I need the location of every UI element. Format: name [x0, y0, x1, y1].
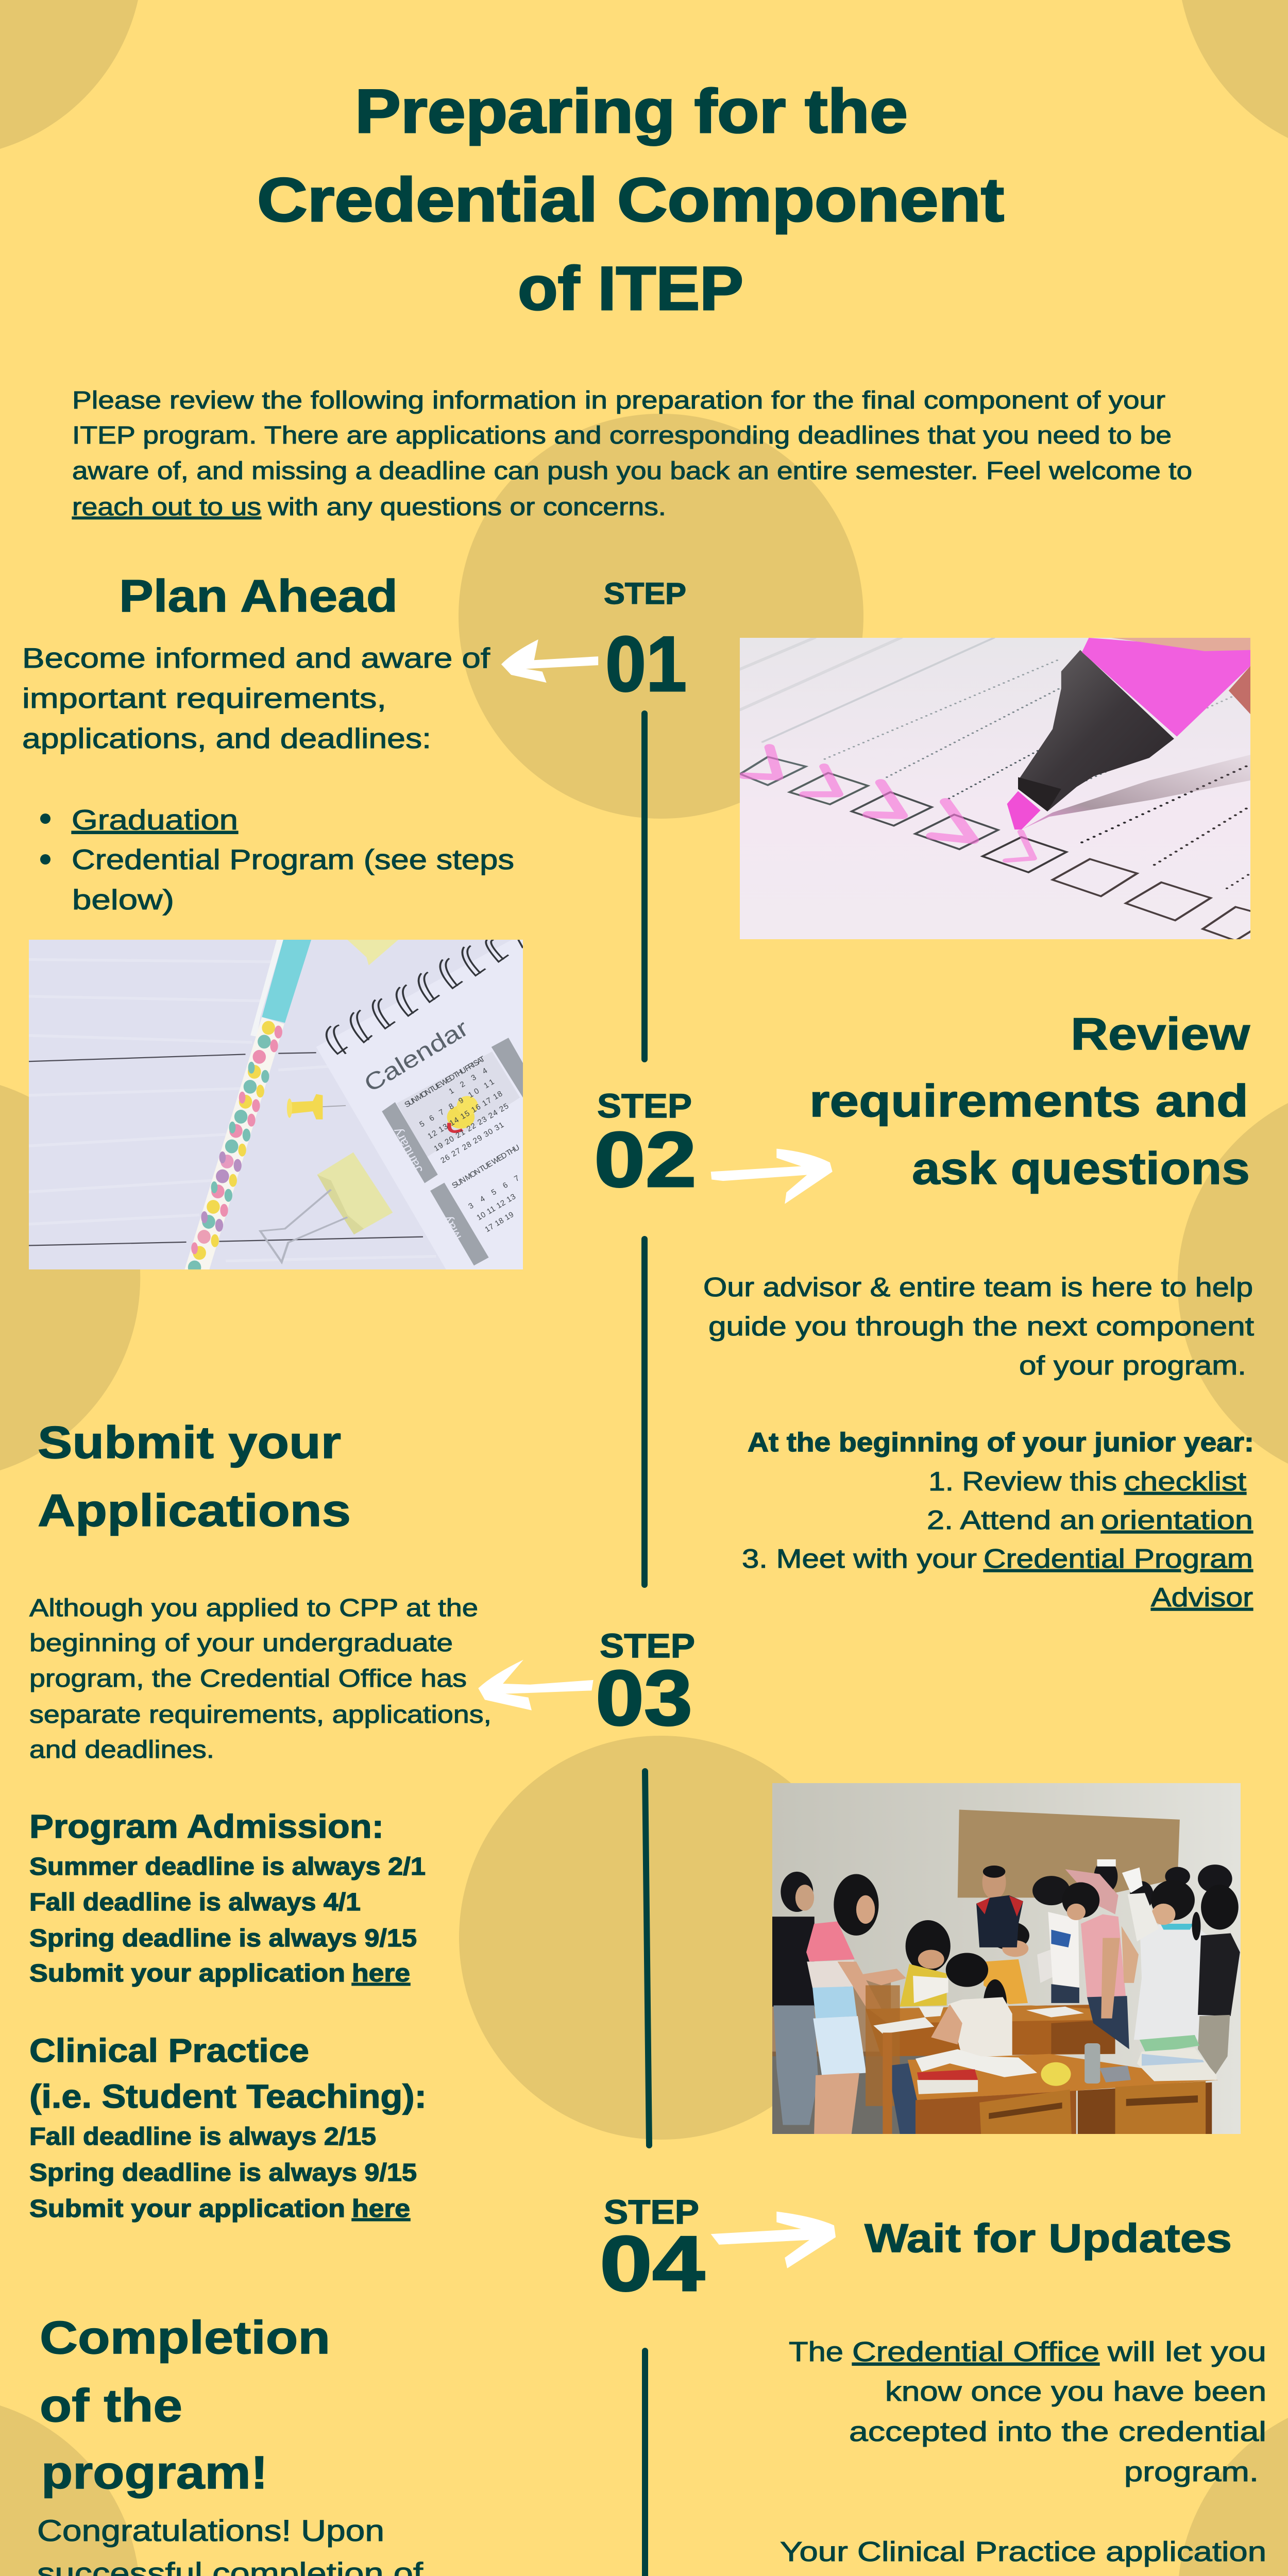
step 4 badge: STEP [604, 2193, 699, 2231]
text block: advisor: guide you through the next component [708, 1312, 1255, 1342]
text block: advisor: of your program. [1019, 1351, 1246, 1381]
step 2 badge [594, 1087, 697, 1204]
program admission deadlines: Summer deadline is always 2/1 [29, 1853, 426, 1880]
text block: applications intro [29, 1595, 492, 1764]
title: Credential Component [257, 165, 1004, 234]
text block: applications intro: beginning of your undergraduate [29, 1630, 453, 1657]
program admission deadlines: Program Admission: [29, 1808, 384, 1845]
intro paragraph: with any questions or concerns. [267, 494, 666, 521]
text block: applications intro: separate requirements, applications, [29, 1701, 492, 1728]
checklist: junior year: 1. Review this [928, 1467, 1117, 1497]
bullet list: Graduation [72, 804, 238, 836]
step 1 badge: 01 [605, 620, 687, 708]
checklist: junior year: Credential Program [984, 1544, 1253, 1574]
intro paragraph: aware of, and missing a deadline can push you back an entire semester. Feel welcome to [72, 457, 1192, 485]
step 2 badge: STEP [597, 1087, 692, 1125]
striped girl [1081, 1914, 1126, 1999]
text block: plan ahead [22, 642, 490, 754]
heading: completion: Completion [40, 2312, 330, 2364]
heading: completion [40, 2312, 330, 2499]
checklist: junior year: 2. Attend an [927, 1505, 1095, 1535]
arrow: step 3 to applications [478, 1660, 594, 1710]
panel: wait for updates [776, 2215, 1266, 2576]
program admission deadlines: here [352, 1960, 410, 1987]
calendar printed text: 26 27 28 29 30 31 [439, 1121, 505, 1165]
calendar printed text: 19 20 21 22 23 24 25 [432, 1101, 510, 1153]
step 4 badge [600, 2193, 705, 2308]
calendar printed text: 17 18 19 [483, 1210, 515, 1234]
text block: credential office: program. [1124, 2456, 1259, 2487]
step 1 badge: STEP [604, 577, 686, 611]
papers [873, 2017, 934, 2034]
intro paragraph: Please review the following information in preparation for the final component of your [72, 387, 1165, 414]
checklist: junior year: 3. Meet with your [742, 1544, 977, 1574]
heading: completion: of the [40, 2380, 182, 2432]
intro paragraph: reach out to us [72, 494, 261, 521]
panel: submit applications [29, 1417, 492, 2223]
timeline connector lines [645, 714, 649, 2576]
chairs [979, 2090, 1072, 2134]
program admission deadlines: Spring deadline is always 9/15 [29, 1925, 417, 1952]
calendar printed text: SUN MON TUE WED THU FRI SAT [403, 1055, 486, 1109]
heading: plan ahead: Plan Ahead [119, 570, 398, 621]
text block: plan ahead: Become informed and aware of [22, 642, 490, 674]
white polo [1134, 1924, 1213, 2040]
step 1 badge [604, 577, 687, 708]
calendar printed text: 10 11 12 13 [475, 1192, 517, 1222]
text block: advisor: Our advisor & entire team is here to help [703, 1273, 1253, 1302]
text block: credential office: Credential Office [852, 2336, 1099, 2367]
title: Preparing for the [355, 77, 908, 146]
text block: credential office: accepted into the credential [849, 2416, 1266, 2447]
calendar printed text: SUN MON TUE WED THU [450, 1143, 521, 1190]
text block: advisor [703, 1273, 1255, 1381]
calendar printed text: 12 13 14 15 16 17 18 [426, 1089, 504, 1141]
intro paragraph [72, 387, 1192, 521]
white tee [1048, 1912, 1079, 1988]
photo: students in classroom [772, 1783, 1241, 2134]
text block: applications intro: and deadlines. [29, 1736, 214, 1764]
text block: applications intro: program, the Credential Office has [29, 1665, 467, 1692]
clinical practice deadlines: Fall deadline is always 2/15 [29, 2123, 376, 2150]
seated girl white top [946, 1953, 988, 1987]
yellow shirt girl [906, 1920, 951, 1972]
clinical practice deadlines: Spring deadline is always 9/15 [29, 2159, 417, 2187]
program admission deadlines: Submit your application [29, 1960, 345, 1987]
table back [866, 2004, 1115, 2056]
clinical practice deadlines: Clinical Practice [29, 2032, 309, 2069]
arrow: step 2 to review [711, 1149, 833, 1204]
heading: review requirements: Review [1071, 1008, 1250, 1059]
heading: wait for updates: Wait for Updates [865, 2215, 1232, 2261]
step 2 badge: 02 [594, 1116, 697, 1204]
text block: credential office: The [789, 2336, 843, 2367]
text block: congratulations [37, 2514, 488, 2576]
checklist: junior year: Advisor [1151, 1583, 1253, 1613]
arrow: step 4 to wait for updates [711, 2212, 836, 2268]
heading: review requirements: ask questions [912, 1143, 1250, 1194]
step 3 badge: 03 [596, 1654, 692, 1742]
calendar printed text: January [390, 1125, 426, 1176]
intro paragraph: ITEP program. There are applications and corresponding deadlines that you need to be [72, 422, 1172, 449]
text block: congratulations: Congratulations! Upon [37, 2514, 384, 2548]
pink blue girl [806, 1921, 855, 1961]
calendar printed text: 1 2 3 4 [447, 1066, 489, 1096]
text block: credential office: know once you have been [885, 2376, 1266, 2407]
clinical practice deadlines: Submit your application [29, 2195, 345, 2223]
calendar printed text: 3 4 5 6 7 [467, 1174, 521, 1211]
text block: credential office [789, 2336, 1266, 2487]
panel: completion of the program [37, 2312, 488, 2576]
heading: review requirements: requirements and [809, 1075, 1248, 1126]
text block: plan ahead: important requirements, [22, 682, 386, 714]
panel: plan ahead [22, 570, 514, 916]
heading: completion: program! [41, 2447, 268, 2499]
text block: applications intro: Although you applied to CPP at the [29, 1595, 478, 1622]
back row [1094, 1860, 1117, 1893]
arrow: step 1 to plan ahead [501, 639, 598, 683]
bullet list: Credential Program (see steps [72, 843, 514, 875]
right black girl [1201, 1885, 1239, 1929]
clinical practice deadlines: here [352, 2195, 410, 2223]
heading: submit applications: Submit your [38, 1417, 341, 1468]
bullet list [40, 804, 514, 916]
front desks [908, 2054, 1218, 2100]
heading: submit applications [38, 1417, 351, 1536]
text block: credential office: will let you [1107, 2336, 1266, 2367]
calendar printed text: 5 6 7 8 9 10 11 [418, 1077, 496, 1129]
checklist: junior year: At the beginning of your junior year: [748, 1428, 1254, 1458]
heading: submit applications: Applications [38, 1485, 351, 1536]
text block: plan ahead: applications, and deadlines: [22, 722, 431, 754]
step 4 badge: 04 [600, 2220, 705, 2308]
step 3 badge: STEP [600, 1626, 695, 1665]
panel: review requirements [703, 1008, 1255, 1613]
calendar printed text: May [440, 1213, 464, 1243]
calendar printed text [359, 1014, 521, 1243]
clinical practice deadlines [29, 2032, 427, 2223]
step 3 badge [596, 1626, 695, 1742]
checklist: junior year: checklist [1124, 1467, 1247, 1497]
orange girl [989, 1921, 1029, 1950]
photo: calendar, pencil and clips [29, 940, 523, 1274]
program admission deadlines [29, 1808, 426, 1987]
left girl [781, 1872, 813, 1912]
title [257, 77, 1004, 323]
clinical practice deadlines: (i.e. Student Teaching): [29, 2078, 427, 2115]
books and objects [916, 2049, 1037, 2077]
bullet list: below) [72, 884, 174, 916]
program admission deadlines: Fall deadline is always 4/1 [29, 1889, 361, 1916]
title: of ITEP [518, 254, 743, 323]
checklist: junior year: orientation [1101, 1505, 1253, 1535]
calendar printed text: Calendar [359, 1014, 473, 1097]
text block: clinical practice application: Your Clinical Practice application [780, 2536, 1266, 2567]
photo: highlighter on checklist [740, 638, 1250, 939]
heading: review requirements [809, 1008, 1250, 1194]
navy girl [982, 1865, 1006, 1900]
checklist: junior year [742, 1428, 1254, 1613]
